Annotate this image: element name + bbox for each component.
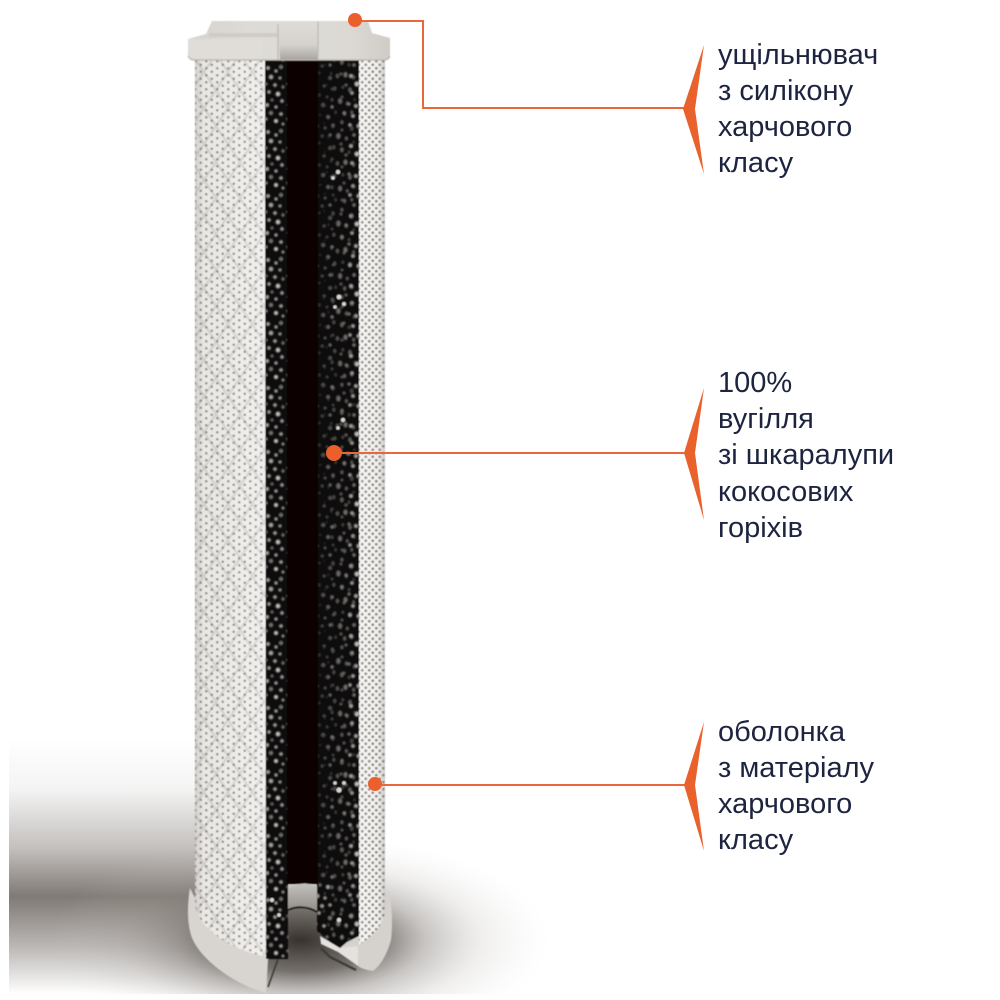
dot marker: seal bbox=[348, 13, 362, 27]
label: seal: з силікону bbox=[718, 75, 854, 107]
wire clips bbox=[268, 948, 356, 987]
inner tube arch bbox=[288, 883, 317, 912]
label: seal: ущільнювач bbox=[718, 39, 878, 71]
label: coconut carbon: вугілля bbox=[718, 403, 814, 435]
filter cartridge bbox=[188, 21, 392, 993]
leader line: seal bbox=[348, 13, 686, 108]
arrow marker: shell bbox=[684, 722, 704, 851]
label: coconut carbon: 100% bbox=[718, 367, 792, 399]
label: seal: класу bbox=[718, 147, 794, 179]
leader line: shell bbox=[368, 777, 686, 791]
label: seal: харчового bbox=[718, 111, 852, 143]
label: shell: харчового bbox=[718, 788, 852, 820]
floor shadow bbox=[9, 738, 549, 994]
bright carbon clusters bbox=[270, 170, 346, 922]
carbon block: dark core bbox=[287, 60, 318, 884]
label: coconut carbon: кокосових bbox=[718, 476, 854, 508]
bottom end cap bbox=[188, 888, 392, 993]
dot marker: shell bbox=[368, 777, 382, 791]
carbon block: right speckled wall bbox=[316, 60, 359, 948]
arrow marker: coconut carbon bbox=[684, 388, 704, 520]
label: shell: з матеріалу bbox=[718, 752, 874, 784]
top end cap bbox=[188, 21, 390, 60]
arrow marker: seal bbox=[683, 45, 704, 174]
dot marker: coconut carbon bbox=[326, 445, 342, 461]
label: shell: оболонка bbox=[718, 716, 846, 748]
label: coconut carbon: горіхів bbox=[718, 512, 803, 544]
label: shell: класу bbox=[718, 824, 794, 856]
outer mesh: right face bbox=[358, 59, 385, 945]
leader line: coconut carbon bbox=[326, 445, 686, 461]
label: coconut carbon: зі шкаралупи bbox=[718, 439, 894, 471]
carbon block: left speckled wall bbox=[265, 60, 288, 959]
outer mesh: left face bbox=[195, 59, 266, 957]
